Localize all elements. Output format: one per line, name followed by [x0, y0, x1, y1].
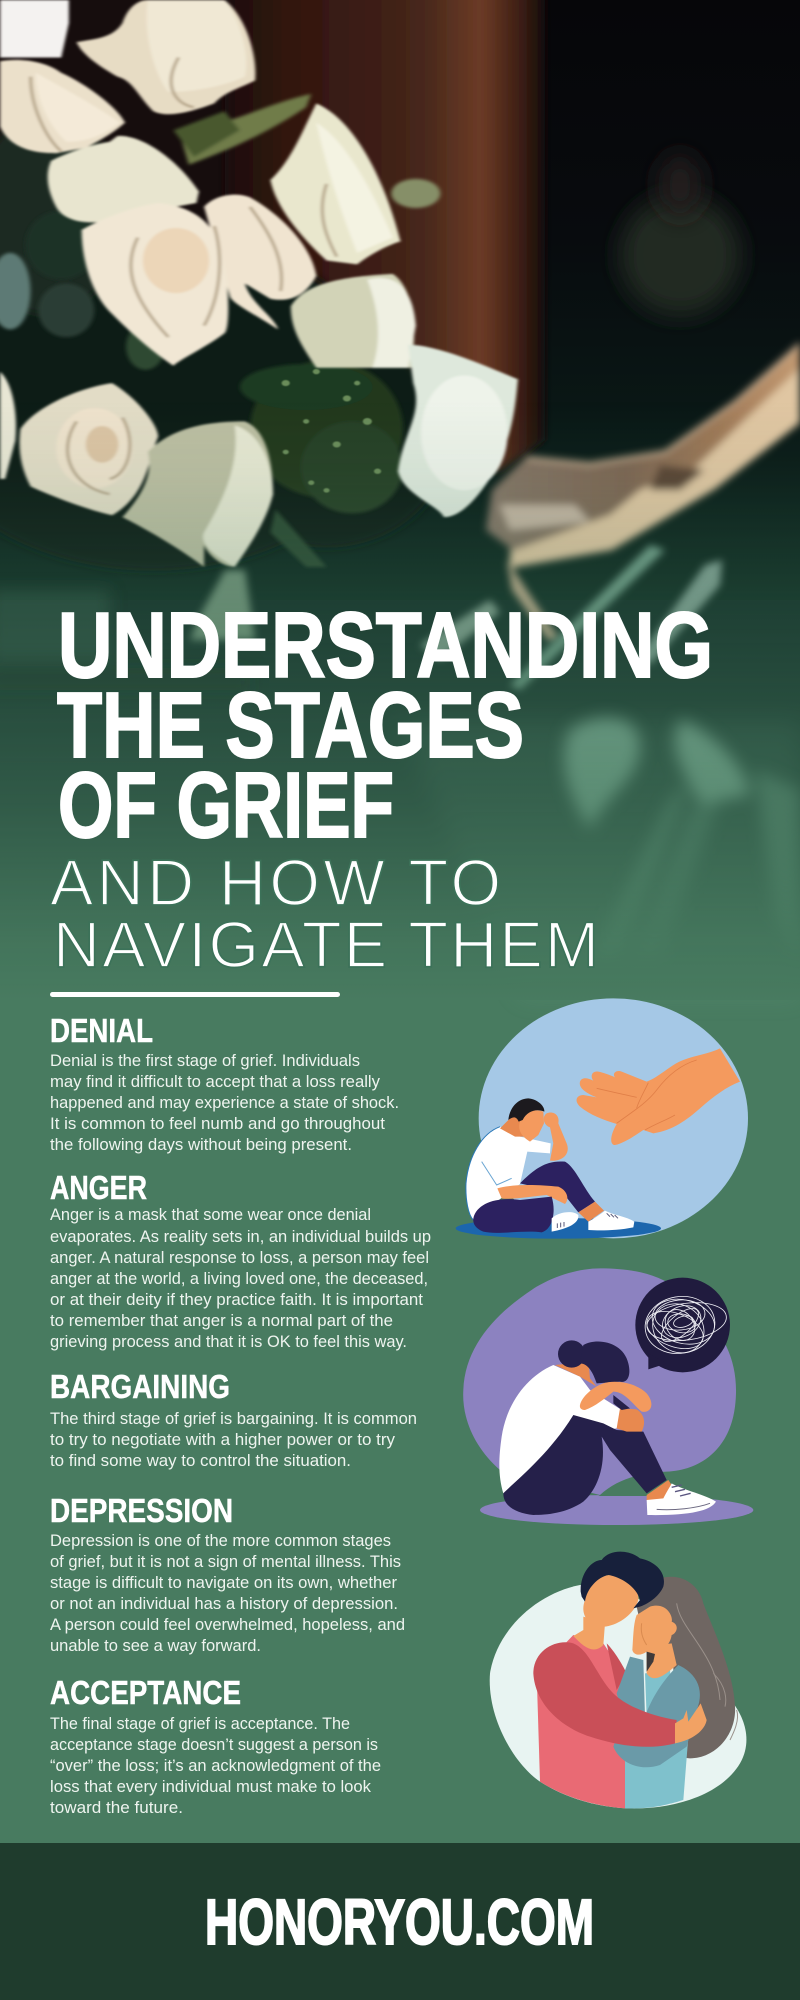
body: denial [50, 1051, 399, 1154]
body: acceptance: toward the future. [50, 1798, 183, 1817]
body: anger: anger at the world, a living loved one, the deceased, [50, 1269, 428, 1288]
icon: thought bubble [635, 1278, 730, 1372]
body: bargaining: to try to negotiate with a higher power or to try [50, 1430, 396, 1449]
body: anger: grieving process and that it is OK to feel this way. [50, 1332, 407, 1351]
body: acceptance: The final stage of grief is acceptance. The [50, 1714, 350, 1733]
section: acceptance [50, 1674, 381, 1817]
heading: anger: ANGER [50, 1169, 147, 1206]
heading: depression: DEPRESSION [50, 1492, 233, 1529]
body: bargaining: The third stage of grief is bargaining. It is common [50, 1409, 417, 1428]
subtitle [50, 846, 599, 981]
body: acceptance [50, 1714, 381, 1817]
footer brand: HONORYOU.COM [205, 1886, 594, 1958]
body: anger: anger. A natural response to loss, a person may feel [50, 1248, 429, 1267]
body: depression: of grief, but it is not a sign of mental illness. This [50, 1552, 401, 1571]
heading: denial: DENIAL [50, 1012, 153, 1049]
body: denial: Denial is the first stage of grief. Individuals [50, 1051, 360, 1070]
heading: bargaining: BARGAINING [50, 1368, 230, 1405]
section: bargaining [50, 1368, 417, 1470]
body: depression: or not an individual has a history of depression. [50, 1594, 398, 1613]
photo: white roses and mourner's hand [0, 0, 800, 1000]
body: anger: Anger is a mask that some wear once denial [50, 1205, 371, 1224]
body: acceptance: acceptance stage doesn’t suggest a person is [50, 1735, 378, 1754]
section: anger [50, 1169, 431, 1351]
body: bargaining [50, 1409, 417, 1470]
title divider [50, 992, 340, 997]
subtitle: AND HOW TO [50, 846, 501, 919]
footer band [0, 1843, 800, 2000]
heading: acceptance: ACCEPTANCE [50, 1674, 241, 1711]
illustration: woman hugging knees with tangled thoughts [463, 1268, 753, 1525]
title [57, 593, 713, 857]
body: depression: unable to see a way forward. [50, 1636, 261, 1655]
body: depression: Depression is one of the more common stages [50, 1531, 391, 1550]
illustration: couple embracing [490, 1552, 746, 1808]
illustration: man sitting with reaching hand [456, 998, 748, 1239]
body: bargaining: to find some way to control the situation. [50, 1451, 351, 1470]
bouquet scaled from photo coordinates [0, 0, 518, 571]
title: OF GRIEF [58, 753, 394, 857]
body: acceptance: “over” the loss; it’s an acknowledgment of the [50, 1756, 381, 1775]
body: depression: stage is difficult to navigate on its own, whether [50, 1573, 397, 1592]
section: denial [50, 1012, 399, 1154]
body: denial: happened and may experience a state of shock. [50, 1093, 399, 1112]
subtitle: NAVIGATE THEM [53, 908, 599, 981]
body: depression: A person could feel overwhelmed, hopeless, and [50, 1615, 405, 1634]
window glare [0, 0, 69, 57]
body: anger: to remember that anger is a normal part of the [50, 1311, 393, 1330]
body: anger: or at their deity if they practice faith. It is important [50, 1290, 423, 1309]
body: denial: the following days without being present. [50, 1135, 352, 1154]
body: denial: It is common to feel numb and go throughout [50, 1114, 385, 1133]
section: depression [50, 1492, 405, 1655]
body: acceptance: loss that every individual must make to look [50, 1777, 372, 1796]
roses [77, 0, 255, 114]
body: depression [50, 1531, 405, 1655]
body: denial: may find it difficult to accept that a loss really [50, 1072, 381, 1091]
body: anger [50, 1205, 431, 1351]
title: THE STAGES [57, 673, 524, 777]
body: anger: evaporates. As reality sets in, an individual builds up [50, 1227, 431, 1246]
